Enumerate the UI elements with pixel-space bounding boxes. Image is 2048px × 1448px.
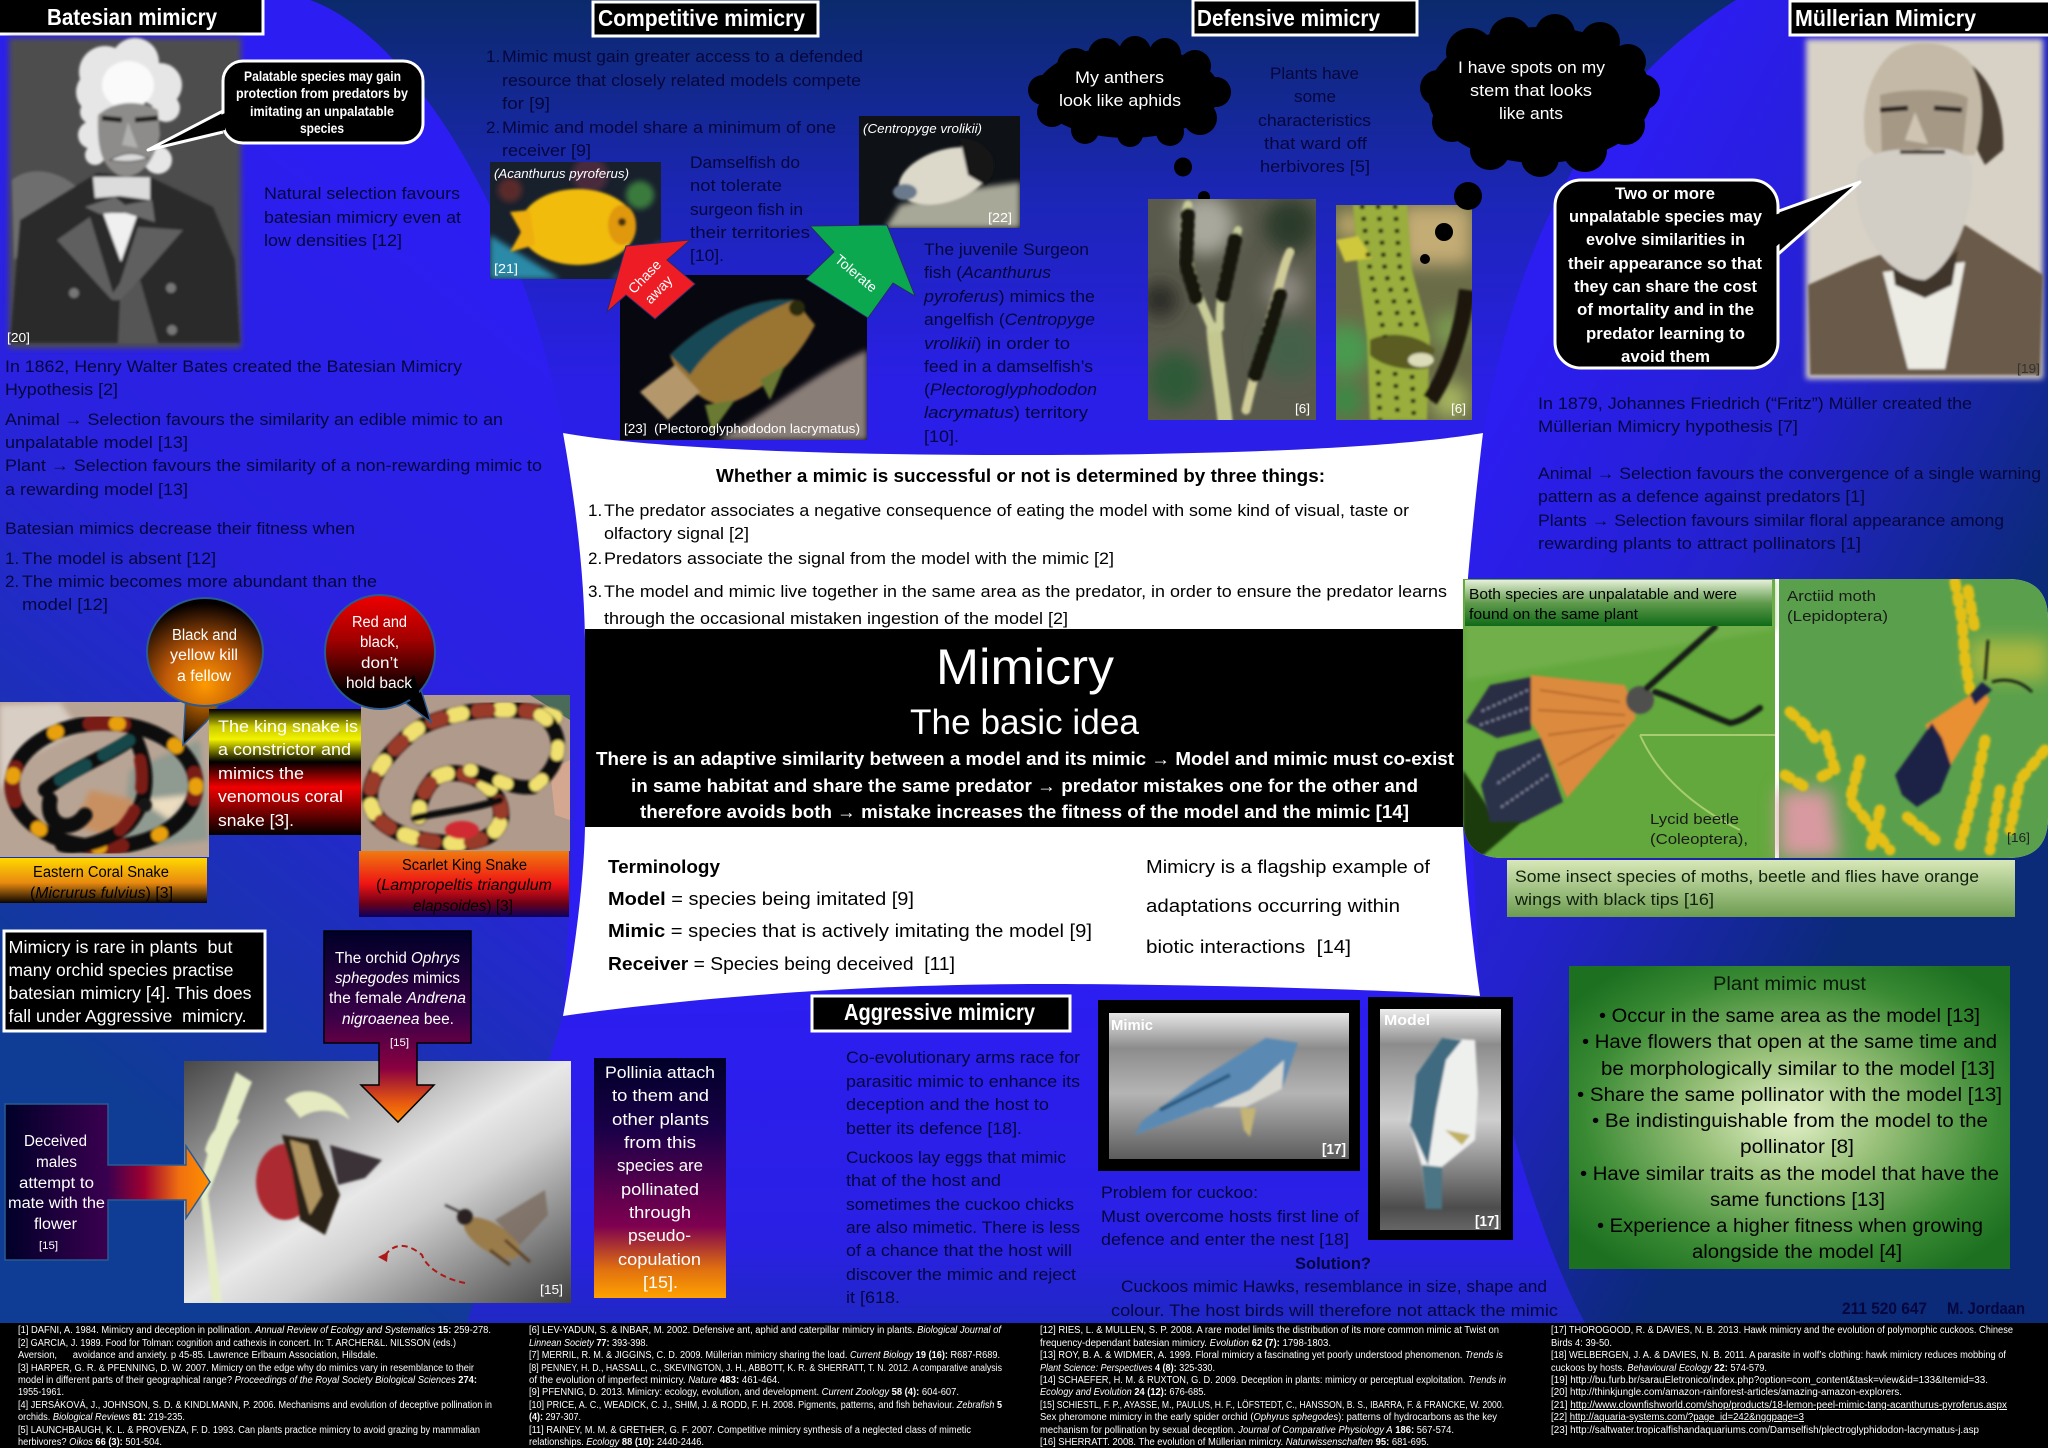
text: hypothesis: In 1862, Henry Walter Bates created the Batesian Mimicry [5, 357, 463, 376]
text box: pollinia [594, 1058, 726, 1298]
panel: plant mimic must: • Have similar traits as the model that have the [1580, 1164, 1999, 1185]
panel: plant mimic must: alongside the model [4] [1692, 1242, 1902, 1263]
photo: eastern coral snake [0, 702, 209, 857]
callout: unpalatable species: Two or more [1615, 185, 1715, 203]
text: arms race: Co-evolutionary arms race for [846, 1048, 1080, 1067]
text box: pollinia: Pollinia attach [605, 1063, 715, 1082]
terminology: Model = species being imitated [9] [608, 889, 914, 909]
text box: mimicry rare in plants: fall under Aggressive mimicry. [8, 1006, 246, 1026]
text: arms race: sometimes the cuckoo chicks [846, 1195, 1074, 1214]
author credit: 211 520 647 [1842, 1299, 1927, 1318]
text: solution: Solution? [1295, 1254, 1371, 1273]
text: juvenile surgeon fish: [10]. [924, 427, 959, 446]
text: plants have characteristics: Plants have [1270, 64, 1359, 83]
heading [1193, 0, 1417, 35]
dashed arrow: bee flight path [384, 1246, 465, 1283]
text: competitive criteria: 2. [486, 118, 500, 137]
references column 2: [6] LEV-YADUN, S. & INBAR, M. 2002. Defensive ant, aphid and caterpillar mimicry in plants. Biological Journal of [529, 1325, 1002, 1336]
photo: Acanthurus pyroferus: (Acanthurus pyroferus) [494, 166, 629, 181]
text: hypothesis: unpalatable model [13] [5, 433, 188, 452]
references column 2 [529, 1325, 1002, 1448]
text: competitive criteria: for [9] [502, 94, 550, 113]
heading: Batesian mimicry [47, 4, 217, 30]
text: arms race: deception and the host to [846, 1095, 1049, 1114]
success conditions list: Predators associate the signal from the model with the mimic [2] [604, 549, 1114, 568]
references column 2: [8] PENNEY, H. D., HASSALL, C., SKEVINGTON, J. H., ABBOTT, K. R. & SHERRATT, T. N. 2012. A comparative analysis [529, 1363, 1002, 1374]
photo: scarlet king snake [361, 695, 570, 851]
text: competitive criteria [486, 47, 863, 160]
text: arms race: of a chance that the host will [846, 1241, 1072, 1260]
portrait of Bates [7, 38, 241, 348]
text: solution: Cuckoos mimic Hawks, resemblance in size, shape and [1121, 1277, 1547, 1296]
terminology: Mimic = species that is actively imitating the model [9] [608, 921, 1092, 941]
text: plants have characteristics: some [1294, 87, 1336, 106]
text: fitness decrease: The mimic becomes more abundant than the [22, 572, 377, 591]
references column 4: [23] http://saltwater.tropicalfishandaquariums.com/Damselfish/plectroglyphidodon-lacrymatus-j.asp [1551, 1425, 1979, 1436]
text: fitness decrease: 1. [5, 549, 19, 568]
text box: king snake: The king snake is [218, 717, 358, 736]
text: Muller hypothesis: Müllerian Mimicry hypothesis [7] [1538, 417, 1798, 436]
references column 2: [10] PRICE, A. C., WEADICK, C. J., SHIM, J. & RODD, F. H. 2008. Pigments, patterns, and fish behaviour. Zebrafish 5 [529, 1400, 1002, 1411]
photo panel: lycid beetle and arctiid moth: [16] [2007, 830, 2030, 845]
text: competitive criteria: resource that closely related models compete [502, 71, 861, 90]
callout: unpalatable species: evolve similarities in [1586, 231, 1745, 249]
references column 1: [4] JERSÁKOVÁ, J., JOHNSON, S. D. & KINDLMANN, P. 2006. Mechanisms and evolution of deceptive pollination in [18, 1398, 492, 1411]
references column 2: [7] MERRIL, R. M. & JIGGINS, C. D. 2009. Müllerian mimicry sharing the load. Current Biology 19 (16): R687-R689. [529, 1350, 1000, 1361]
header: both species unpalatable: Both species are unpalatable and were [1469, 586, 1737, 603]
terminology [608, 857, 1092, 974]
arrow box: deceived males: flower [34, 1216, 77, 1233]
photo: Acanthurus pyroferus [490, 157, 661, 279]
text: fitness decrease [5, 519, 377, 614]
author credit [1842, 1299, 2025, 1318]
references column 4: [18] WELBERGEN, J. A. & DAVIES, N. B. 2011. A parasite in wolf’s clothing: hawk mimicry reduces mobbing of [1551, 1350, 2006, 1361]
text: fitness decrease: Batesian mimics decrease their fitness when [5, 519, 355, 538]
central white panel [563, 433, 1483, 1016]
text: solution: colour. The host birds will therefore not attack the mimic [1111, 1301, 1559, 1320]
callout: unpalatable species: they can share the cost [1574, 278, 1757, 296]
callout: palatable species: imitating an unpalatable [250, 103, 394, 119]
text box: mimicry rare in plants [4, 931, 265, 1031]
caption: eastern coral snake: Eastern Coral Snake [33, 864, 169, 881]
success conditions list: The model and mimic live together in the same area as the predator, in order to ensure the predator learns [604, 582, 1447, 601]
text box: pollinia: other plants [612, 1110, 709, 1129]
panel: plant mimic must: • Be indistinguishable from the model to the [1592, 1111, 1988, 1132]
terminology: Terminology [608, 857, 720, 877]
references column 2: of the evolution of imperfect mimicry. Nature 483: 461-464. [529, 1375, 780, 1386]
success conditions list: through the occasional mistaken ingestion of the model [2] [604, 609, 1068, 628]
text: Muller hypothesis: In 1879, Johannes Friedrich (“Fritz”) Müller created the [1538, 394, 1972, 413]
text: fitness decrease: model [12] [22, 595, 108, 614]
photo: anthers like aphids [1142, 195, 1320, 420]
text box: mimicry rare in plants: many orchid species practise [8, 960, 234, 980]
arrow box: orchid mimics bee: nigroaenea bee. [342, 1011, 454, 1028]
portrait of Muller [1806, 39, 2043, 379]
text: Muller hypothesis [1538, 394, 2041, 553]
success conditions list: 3. [588, 582, 602, 601]
header: both species unpalatable: found on the same plant [1469, 606, 1639, 623]
success conditions list [588, 501, 1447, 628]
references column 1: Aversion, avoidance and anxiety. p 45-85. Lawrence Erlbaum Association, Hilsdale. [18, 1350, 378, 1361]
text box: king snake: mimics the [218, 764, 304, 783]
references column 3: Ecology and Evolution 24 (12): 676-685. [1040, 1387, 1206, 1398]
panel: plant mimic must: • Experience a higher fitness when growing [1597, 1216, 1983, 1237]
references column 4: [20] http://thinkjungle.com/amazon-rainforest-articles/amazing-amazon-explorers. [1551, 1387, 1902, 1398]
text: plants have characteristics [1258, 64, 1371, 176]
photo: hawk model [1368, 997, 1513, 1240]
text: damselfish: Damselfish do [690, 153, 800, 172]
callout: unpalatable species: their appearance so that [1568, 255, 1763, 273]
text box: king snake: a constrictor and [218, 740, 351, 759]
text: competitive criteria: 1. [486, 47, 500, 66]
panel: plant mimic must: pollinator [8] [1740, 1137, 1854, 1158]
text: juvenile surgeon fish [923, 240, 1097, 446]
flagship statement [1146, 857, 1431, 957]
arrow box: orchid mimics bee: The orchid Ophrys [335, 950, 460, 967]
callout: palatable species: protection from predators by [236, 85, 408, 101]
references column 1: [3] HARPER, G. R. & PFENNING, D. W. 2007. Mimicry on the edge why do mimics vary in resemblance to their [18, 1363, 475, 1374]
success conditions list: olfactory signal [2] [604, 524, 749, 543]
success conditions heading: Whether a mimic is successful or not is determined by three things: [716, 465, 1325, 486]
photo: Centropyge vrolikii [859, 116, 1020, 228]
references column 3: Sex pheromone mimicry in the early spider orchid (Ophyrus sphegodes): patterns of hydrocarbons as the key [1040, 1412, 1497, 1423]
callout: red and black rhyme: hold back [346, 675, 412, 692]
references [0, 1323, 2048, 1448]
photo: cuckoo mimic [1098, 1000, 1360, 1171]
photo: arctiid moth [1779, 579, 2048, 858]
summary text [596, 749, 1454, 822]
text: fitness decrease: 2. [5, 572, 19, 591]
text: plants have characteristics: that ward off [1264, 134, 1367, 153]
text: Muller hypothesis: pattern as a defence against predators [1] [1538, 487, 1865, 506]
label: lycid beetle: Lycid beetle [1650, 811, 1739, 828]
photo: hawk model: [17] [1475, 1213, 1499, 1230]
text box: mimicry rare in plants: batesian mimicry [4]. This does [8, 983, 252, 1003]
panel: plant mimic must: be morphologically similar to the model [13] [1601, 1059, 1995, 1080]
callout: red and black rhyme [325, 595, 435, 722]
references column 3: [12] RIES, L. & MULLEN, S. P. 2008. A rare model limits the distribution of its more common mimic at Twist on [1040, 1325, 1499, 1336]
text: Muller hypothesis: rewarding plants to attract pollinators [1] [1538, 534, 1861, 553]
success conditions list: 1. [588, 501, 602, 520]
text: arms race: are also mimetic. There is less [846, 1218, 1080, 1237]
summary text: in same habitat and share the same predator → predator mistakes one for the other and [631, 776, 1418, 796]
photo: Acanthurus pyroferus: [21] [494, 261, 518, 276]
label: arctiid moth: (Lepidoptera) [1787, 608, 1888, 625]
text: hypothesis: a rewarding model [13] [5, 480, 188, 499]
photo: Centropyge vrolikii: (Centropyge vrolikii) [863, 121, 982, 136]
orchid citation: [15] [540, 1282, 563, 1297]
text: natural selection [264, 184, 461, 250]
text: juvenile surgeon fish: The juvenile Surgeon [924, 240, 1089, 259]
caption: scarlet king snake: (Lampropeltis triangulum [376, 877, 552, 894]
arrow: chase away: away [641, 272, 676, 307]
arrow: chase away: Chase [625, 256, 664, 297]
text: plants have characteristics: characteristics [1258, 111, 1371, 130]
panel: plant mimic must: • Occur in the same area as the model [13] [1599, 1006, 1980, 1027]
subtitle: The basic idea [910, 703, 1140, 742]
photo panel: lycid beetle and arctiid moth [1463, 579, 2048, 858]
portrait of Bates: [20] [7, 330, 30, 345]
references column 4 [1551, 1325, 2013, 1436]
references column 1: [5] LAUNCHBAUGH, K. L. & PROVENZA, F. D. 1993. Can plants practice mimicry to avoid grazing by mammalian [18, 1425, 480, 1436]
arrow box: deceived males: Deceived [24, 1133, 87, 1150]
panel: plant mimic must: • Share the same pollinator with the model [13] [1577, 1085, 2002, 1106]
arrow: chase away [607, 240, 695, 319]
photo: Plectoroglyphododon lacrymatus [620, 275, 867, 440]
text box: pollinia: pollinated [621, 1180, 699, 1199]
references column 1: [1] DAFNI, A. 1984. Mimicry and deception in pollination. Annual Review of Ecology and Systematics 15: 259-278. [18, 1325, 491, 1336]
thought cloud: spots: stem that looks [1470, 82, 1592, 100]
panel: plant mimic must [1569, 966, 2010, 1269]
photo: orchid and bee [184, 1061, 571, 1303]
text: juvenile surgeon fish: angelfish (Centropyge [924, 310, 1095, 329]
text box: king snake: venomous coral [218, 787, 343, 806]
references column 1: herbivores? Oikos 66 (3): 501-504. [18, 1437, 162, 1448]
panel: Defensive mimicry [1028, 0, 1660, 420]
text box: pollinia: [15]. [643, 1273, 678, 1292]
text: damselfish [690, 153, 810, 265]
author credit: M. Jordaan [1947, 1299, 2025, 1318]
text: arms race: parasitic mimic to enhance its [846, 1072, 1080, 1091]
arrow box: deceived males: [15] [39, 1240, 58, 1252]
photo: lycid beetle [1463, 579, 1775, 858]
flagship statement: adaptations occurring within [1146, 896, 1400, 916]
references column 1: [2] GARCIA, J. 1989. Food for Tolman: cognition and cathexis in concert. In: T. ARCHER&L. NILSSON (eds.) [18, 1338, 456, 1349]
callout: unpalatable species: predator learning to [1586, 325, 1745, 343]
callout: palatable species: species [300, 120, 344, 136]
arrow box: orchid mimics bee [324, 931, 471, 1122]
callout: red and black rhyme: don’t [361, 655, 399, 672]
text: damselfish: [10]. [690, 246, 724, 265]
text: fitness decrease: The model is absent [12] [22, 549, 216, 568]
caption: scarlet king snake: Scarlet King Snake [402, 857, 527, 874]
summary text: There is an adaptive similarity between a model and its mimic → Model and mimic must co-exist [596, 749, 1454, 769]
references column 3: [15] SCHIESTL, F. P., AYASSE, M., PAULUS, H. F., LÖFSTEDT, C., HANSSON, B. S., IBARRA, F. & FRANCKE, W. 2000. [1040, 1399, 1504, 1411]
text: problem for cuckoo [1101, 1183, 1359, 1249]
references column 4: [21] http://www.clownfishworld.com/shop/products/18-lemon-peel-mimic-tang-acanthurus-pyroferus.aspx [1551, 1400, 2007, 1411]
arrow box: orchid mimics bee: [15] [390, 1037, 409, 1049]
text box: pollinia: from this [624, 1133, 696, 1152]
panel: Competitive mimicry [486, 2, 1097, 446]
references column 3: [13] ROY, B. A. & WIDMER, A. 1999. Floral mimicry a fascinating yet poorly understood phenomenon. Trends is [1040, 1350, 1503, 1361]
callout: unpalatable species [1555, 180, 1860, 368]
thought cloud: anthers: look like aphids [1059, 92, 1181, 110]
references column 3: mechanism for pollination by sexual deception. Journal of Comparative Physiology A 186: 567-574. [1040, 1425, 1454, 1436]
references column 4: Birds 4: 39-50. [1551, 1338, 1612, 1349]
heading: Defensive mimicry [1197, 5, 1380, 31]
label: arctiid moth [1787, 588, 1888, 625]
text box: pollinia: species are [617, 1156, 703, 1175]
references column 3: [16] SHERRATT. 2008. The evolution of Müllerian mimicry. Naturwissenschaften 95: 681-695. [1040, 1437, 1429, 1448]
text box: king snake [209, 709, 361, 835]
text: natural selection: batesian mimicry even at [264, 208, 461, 227]
flagship statement: biotic interactions [14] [1146, 937, 1351, 957]
photo: Centropyge vrolikii: [22] [988, 210, 1012, 225]
caption: eastern coral snake [0, 858, 207, 903]
text: problem for cuckoo: Must overcome hosts first line of [1101, 1207, 1359, 1226]
label: arctiid moth: Arctiid moth [1787, 588, 1876, 605]
references column 3: [14] SCHAEFER, H. M. & RUXTON, G. D. 2009. Deception in plants: mimicry or perceptual exploitation. Trends in [1040, 1375, 1506, 1386]
text: competitive criteria: Mimic and model share a minimum of one [502, 118, 836, 137]
callout: unpalatable species: avoid them [1621, 348, 1710, 366]
summary text: therefore avoids both → mistake increases the fitness of the model and the mimic [14] [640, 802, 1409, 822]
header: both species unpalatable [1465, 580, 1772, 626]
callout: black and yellow rhyme: yellow kill [170, 647, 238, 664]
panel: plant mimic must: same functions [13] [1710, 1190, 1885, 1211]
arrow: tolerate [806, 225, 915, 318]
references column 2: Linnean Society 77: 393-398. [529, 1338, 648, 1349]
caption: orange wings [1507, 860, 2015, 917]
caption: scarlet king snake: elapsoides) [3] [413, 898, 513, 915]
text: competitive criteria: receiver [9] [502, 141, 591, 160]
text: plants have characteristics: herbivores [5] [1260, 157, 1370, 176]
caption: scarlet king snake [359, 851, 569, 917]
heading: Müllerian Mimicry [1795, 5, 1976, 31]
references column 1 [18, 1325, 492, 1448]
text: juvenile surgeon fish: pyroferus) mimics the [923, 287, 1095, 306]
text: hypothesis [5, 357, 542, 499]
thought cloud: anthers: My anthers [1075, 69, 1164, 87]
text box: mimicry rare in plants: Mimicry is rare in plants but [8, 937, 233, 957]
references column 4: [17] THOROGOOD, R. & DAVIES, N. B. 2013. Hawk mimicry and the evolution of polymorphic cuckoos. Chinese [1551, 1325, 2013, 1336]
panel: Mullerian mimicry [1463, 1, 2048, 1269]
label: lycid beetle [1650, 811, 1748, 848]
references column 3 [1040, 1325, 1506, 1448]
text box: pollinia: copulation [618, 1250, 701, 1269]
text: competitive criteria: Mimic must gain greater access to a defended [502, 47, 863, 66]
text box: pollinia: pseudo- [628, 1226, 691, 1245]
callout: red and black rhyme: black, [360, 634, 399, 651]
callout: black and yellow rhyme [147, 598, 263, 745]
references column 2: relationships. Ecology 88 (10): 2440-2446. [529, 1437, 704, 1448]
text: arms race [846, 1048, 1080, 1307]
text: problem for cuckoo: defence and enter the nest [18] [1101, 1230, 1349, 1249]
references column 4: [22] http://aquaria-systems.com/?page_id=242&nggpage=3 [1551, 1412, 1804, 1423]
arrow box: deceived males: mate with the [8, 1195, 105, 1212]
caption: orange wings: wings with black tips [16] [1514, 891, 1714, 909]
success conditions list: 2. [588, 549, 602, 568]
label: lycid beetle: (Coleoptera), [1650, 831, 1748, 848]
photo: cuckoo mimic: [17] [1322, 1141, 1346, 1158]
text: solution [1111, 1254, 1559, 1320]
thought bubbles: spots [1420, 182, 1482, 264]
panel: Aggressive mimicry [812, 996, 1559, 1320]
callout: unpalatable species: of mortality and in the [1577, 301, 1754, 319]
callout: palatable species [148, 61, 423, 150]
arrow box: deceived males: males [36, 1154, 77, 1171]
thought cloud: anthers [1028, 36, 1231, 147]
panel: Batesian mimicry [0, 0, 542, 614]
text box: pollinia: through [629, 1203, 691, 1222]
arrow: tolerate: Tolerate [832, 251, 881, 295]
references column 4: cuckoos by hosts. Behavioural Ecology 22: 574-579. [1551, 1363, 1767, 1374]
text: damselfish: surgeon fish in [690, 200, 803, 219]
text: hypothesis: Plant → Selection favours the similarity of a non-rewarding mimic to [5, 456, 542, 475]
arrow box: orchid mimics bee: the female Andrena [329, 990, 466, 1007]
text: damselfish: their territories [690, 223, 810, 242]
text: Muller hypothesis: Animal → Selection favours the convergence of a single warning [1538, 464, 2041, 483]
text: juvenile surgeon fish: feed in a damselfish’s [924, 357, 1093, 376]
references column 1: model in different parts of their geographical range? Proceedings of the Royal Society Biological Sciences 274: [18, 1375, 477, 1386]
title block: the basic idea [585, 629, 1463, 827]
text: damselfish: not tolerate [690, 176, 782, 195]
portrait of Muller: [19] [2017, 361, 2040, 376]
text: hypothesis: Hypothesis [2] [5, 380, 118, 399]
heading: Aggressive mimicry [844, 999, 1035, 1025]
text: natural selection: low densities [12] [264, 231, 402, 250]
thought cloud: spots [1420, 14, 1660, 177]
success conditions list: The predator associates a negative consequence of eating the model with some kind of visual, taste or [604, 501, 1409, 520]
panel: plant mimic must: Plant mimic must [1713, 974, 1867, 995]
references column 1: 1955-1961. [18, 1387, 64, 1398]
panel: plant mimic must: • Have flowers that open at the same time and [1582, 1032, 1997, 1053]
thought bubbles: anthers [1174, 158, 1226, 225]
photo: hawk model: Model [1384, 1012, 1430, 1029]
photo: Plectoroglyphododon lacrymatus: [23] (Plectoroglyphododon lacrymatus) [624, 421, 860, 436]
arrow box: deceived males [5, 1104, 210, 1260]
text: juvenile surgeon fish: vrolikii) in order to [924, 334, 1070, 353]
references column 2: (4): 297-307. [529, 1412, 581, 1423]
photo: cuckoo mimic: Mimic [1111, 1017, 1153, 1034]
references column 2: [11] RAINEY, M. M. & GRETHER, G. F. 2007. Competitive mimicry synthesis of a neglected class of mimetic [529, 1425, 971, 1436]
references column 1: orchids. Biological Reviews 81: 219-235. [18, 1412, 185, 1423]
callout: palatable species: Palatable species may gain [244, 68, 401, 84]
references column 2: [9] PFENNIG, D. 2013. Mimicry: ecology, evolution, and development. Current Zoology 58 (4): 604-607. [529, 1387, 959, 1398]
references column 4: [19] http://bu.furb.br/sarauEletronico/index.php?option=com_content&task=view&id=133&Itemid=33. [1551, 1375, 1988, 1386]
caption: eastern coral snake: (Micrurus fulvius) [3] [30, 885, 173, 902]
thought cloud: spots: like ants [1499, 105, 1563, 123]
flagship statement: Mimicry is a flagship example of [1146, 857, 1431, 877]
photo: stem spots like ants [1336, 205, 1472, 420]
text: juvenile surgeon fish: lacrymatus ) territory [924, 403, 1089, 422]
thought cloud: spots: I have spots on my [1458, 59, 1606, 77]
heading [0, 0, 263, 34]
text: arms race: better its defence [18]. [846, 1119, 1022, 1138]
text: arms race: Cuckoos lay eggs that mimic [846, 1148, 1066, 1167]
title: Mimicry [936, 639, 1114, 695]
callout: red and black rhyme: Red and [352, 614, 407, 631]
callout: black and yellow rhyme: Black and [172, 627, 237, 644]
photo: anthers like aphids: [6] [1295, 401, 1310, 416]
text: problem for cuckoo: Problem for cuckoo: [1101, 1183, 1258, 1202]
text: Muller hypothesis: Plants → Selection favours similar floral appearance among [1538, 511, 2004, 530]
text: hypothesis: Animal → Selection favours the similarity an edible mimic to an [5, 410, 503, 429]
heading [1790, 1, 2048, 35]
photo: stem spots like ants: [6] [1451, 401, 1466, 416]
heading: Competitive mimicry [598, 5, 805, 31]
text: arms race: discover the mimic and reject [846, 1265, 1076, 1284]
text: arms race: that of the host and [846, 1171, 1001, 1190]
text: arms race: it [618. [846, 1288, 900, 1307]
references column 3: Plant Science: Perspectives 4 (8): 325-330. [1040, 1363, 1215, 1374]
arrow box: deceived males: attempt to [19, 1175, 94, 1192]
arrow box: orchid mimics bee: sphegodes mimics [335, 970, 460, 987]
heading [812, 996, 1070, 1031]
terminology: Receiver = Species being deceived [11] [608, 954, 955, 974]
text: juvenile surgeon fish: fish (Acanthurus [924, 263, 1052, 282]
text box: king snake: snake [3]. [218, 811, 294, 830]
references column 3: frequency-dependant batesian mimicry. Evolution 62 (7): 1798-1803. [1040, 1338, 1331, 1349]
callout: unpalatable species: unpalatable species may [1569, 208, 1763, 226]
text: natural selection: Natural selection favours [264, 184, 460, 203]
callout: black and yellow rhyme: a fellow [177, 668, 232, 685]
caption: orange wings: Some insect species of moths, beetle and flies have orange [1515, 868, 1979, 886]
text box: pollinia: to them and [612, 1086, 709, 1105]
text: juvenile surgeon fish: (Plectoroglyphododon [924, 380, 1097, 399]
